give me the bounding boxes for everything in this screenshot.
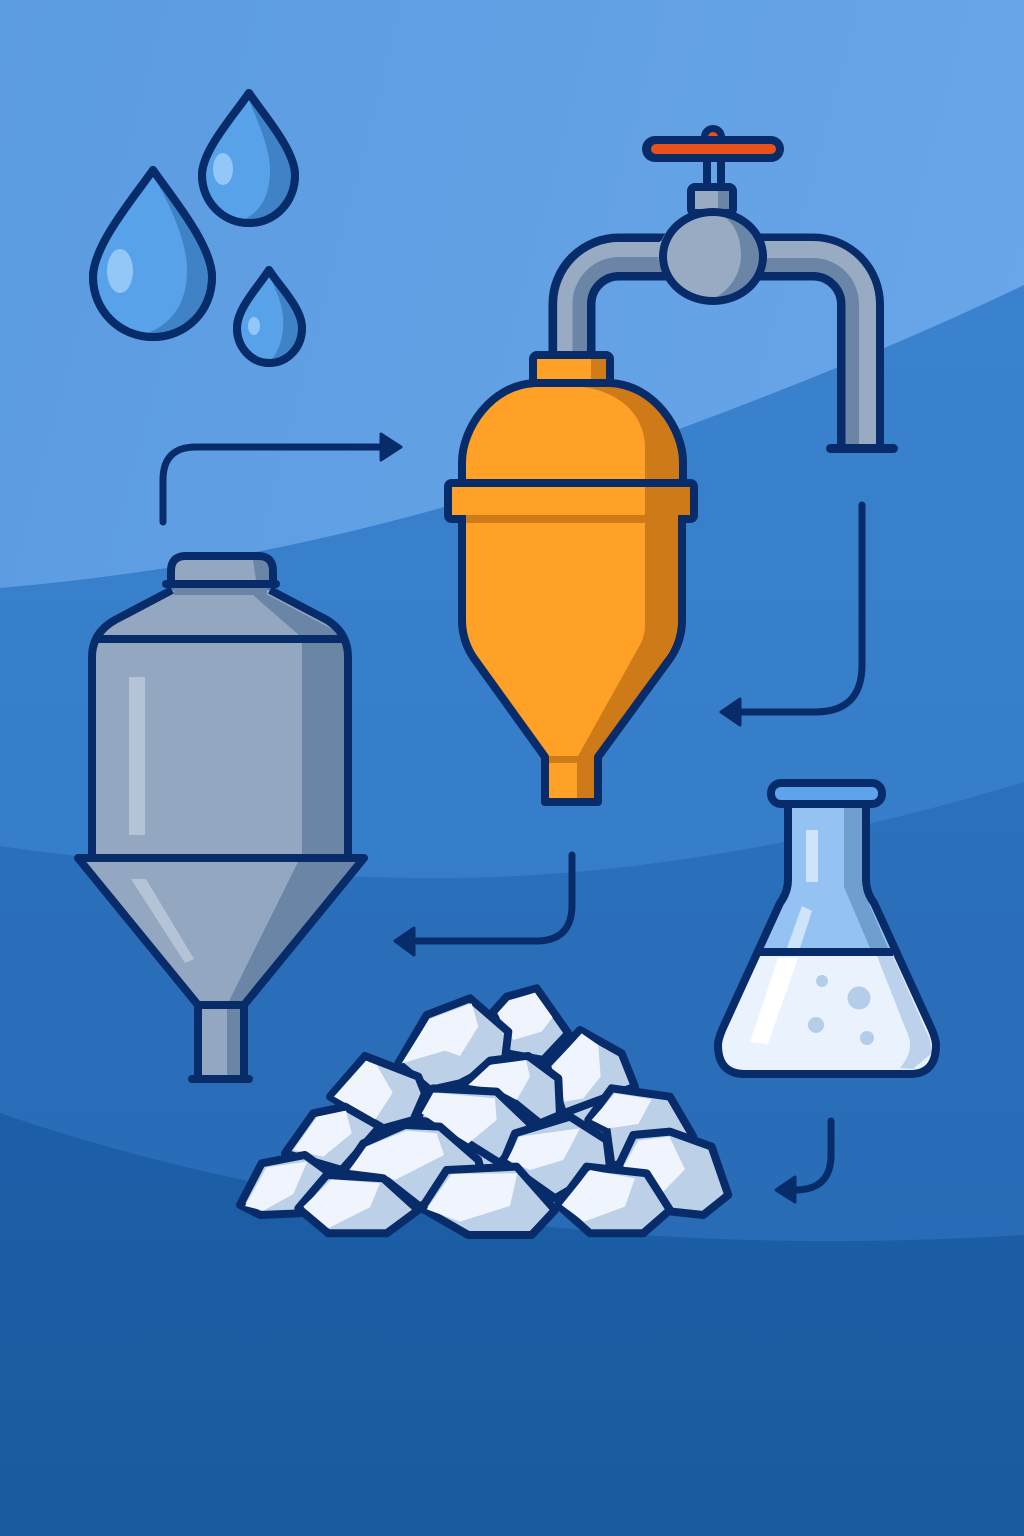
tank band (448, 483, 694, 519)
icon: medium water drop (202, 93, 295, 223)
arrow: faucet to filter tank (721, 505, 862, 725)
crystal 3 (547, 1030, 635, 1113)
crystal 6 (417, 1088, 532, 1163)
arrow: flask to crystals (776, 1121, 831, 1202)
pipe base bar (826, 444, 898, 453)
flask liquid (718, 952, 936, 1074)
crystal 10 (503, 1117, 610, 1198)
icon: laboratory flask (718, 783, 936, 1074)
icon: pile of salt crystals (240, 988, 728, 1235)
icon: water drops (93, 93, 302, 363)
flask outline (718, 805, 936, 1074)
crystal 15 (558, 1167, 670, 1233)
crystal 11 (618, 1132, 728, 1215)
arrow: silo to filter tank (163, 434, 401, 522)
crystal 14 (422, 1167, 555, 1235)
left pipe (565, 250, 680, 360)
icon: faucet and pipes (565, 125, 898, 453)
tank dome (462, 383, 683, 484)
icon: orange filter tank (448, 355, 694, 802)
valve ball (658, 212, 763, 301)
icon: large water drop (93, 170, 212, 337)
crystal 8 (285, 1107, 380, 1170)
icon: grey storage silo (78, 556, 364, 1083)
arrow: filter tank to silo (395, 855, 572, 955)
icon: small water drop (237, 270, 302, 363)
crystal 12 (240, 1155, 330, 1215)
valve handle (642, 125, 784, 162)
crystal 13 (298, 1175, 418, 1233)
crystal 4 (463, 1056, 560, 1123)
silo spout (188, 1005, 253, 1083)
pile backing (270, 1010, 713, 1203)
flask upper glass (760, 805, 893, 952)
crystal 1 (493, 988, 568, 1060)
right pipe (660, 250, 868, 445)
crystal 9 (345, 1125, 480, 1207)
crystal 7 (588, 1088, 693, 1167)
tank neck (533, 355, 610, 383)
valve stem (707, 158, 721, 188)
silo body (92, 587, 348, 858)
valve neck (691, 187, 733, 213)
tank lower body (462, 515, 682, 802)
crystal 2 (398, 998, 508, 1090)
crystal 5 (330, 1056, 425, 1128)
silo cap (162, 556, 280, 588)
flask lip (771, 783, 882, 804)
silo cone (78, 858, 364, 1005)
